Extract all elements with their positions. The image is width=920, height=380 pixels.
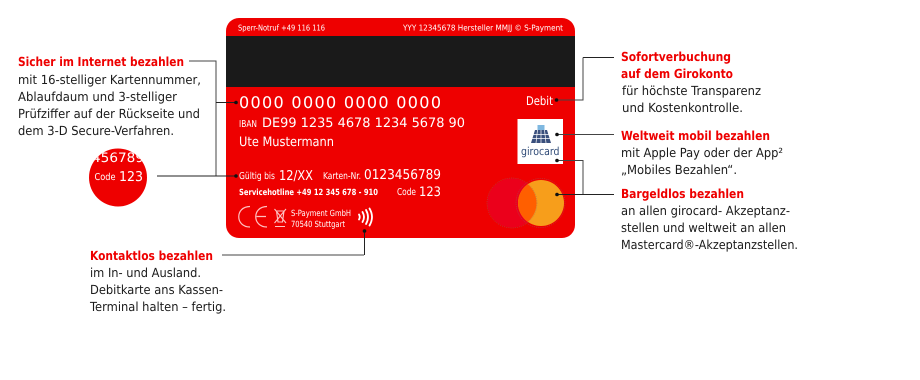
- heading: auf dem Girokonto: [621, 66, 733, 81]
- card number label: Karten-Nr.: [323, 171, 361, 182]
- heading: [621, 49, 733, 81]
- IBAN label: IBAN: [239, 119, 257, 130]
- emergency number: Sperr-Notruf +49 116 116: [238, 24, 325, 32]
- icon: CE mark: [239, 206, 267, 227]
- panel: card back: [226, 18, 575, 238]
- leader line: instant booking: [555, 58, 614, 102]
- service hotline: Servicehotline +49 12 345 678 - 910: [239, 188, 378, 198]
- text block: internet payment: [18, 54, 201, 138]
- body: [622, 83, 761, 115]
- text block: instant booking: [621, 49, 761, 115]
- valid until value: 12/XX: [279, 168, 313, 184]
- body: Mastercard®-Akzeptanzstellen.: [621, 237, 798, 252]
- heading: Bargeldlos bezahlen: [621, 186, 744, 201]
- magnetic stripe: [226, 36, 575, 87]
- heading: Weltweit mobil bezahlen: [621, 128, 770, 143]
- magnifier: security code: [89, 148, 147, 206]
- security code: 123: [419, 185, 441, 200]
- body: Ablaufdaum und 3-stelliger: [18, 89, 178, 104]
- manufacturer line: YYY 12345678 Hersteller MMJJ © S-Payment: [402, 24, 563, 32]
- body: im In- und Ausland.: [90, 265, 201, 280]
- text block: contactless payment: [89, 248, 226, 314]
- security code label: Code: [397, 187, 416, 198]
- body: Debitkarte ans Kassen-: [90, 282, 223, 297]
- heading: Sofortverbuchung: [621, 49, 731, 64]
- IBAN number: DE99 1235 4678 1234 5678 90: [262, 116, 465, 131]
- body: stellen und weltweit an allen: [621, 220, 786, 235]
- body: für höchste Transparenz: [622, 83, 761, 98]
- body: und Kostenkontrolle.: [622, 100, 743, 115]
- body: [621, 145, 783, 177]
- leader line: mobile payment: [555, 133, 614, 136]
- icon: girocard building: [531, 125, 551, 143]
- icon: WEEE bin: [274, 209, 286, 226]
- icon: contactless: [359, 208, 372, 226]
- body: an allen girocard- Akzeptanz-: [621, 203, 790, 218]
- body: dem 3-D Secure-Verfahren.: [18, 123, 174, 138]
- leader line: contactless: [222, 229, 366, 255]
- body: [18, 72, 201, 138]
- leader lines: cashless payment: [555, 159, 614, 196]
- magnified code label: Code: [94, 172, 116, 183]
- issuer name: S-Payment GmbH: [291, 209, 351, 219]
- magnified code: 123: [119, 169, 143, 185]
- valid until label: Gültig bis: [239, 171, 275, 182]
- text block: mobile payment: [621, 128, 783, 177]
- body: [89, 265, 226, 314]
- body: „Mobiles Bezahlen“.: [621, 162, 737, 177]
- infographic: [18, 18, 797, 314]
- body: Prüfziffer auf der Rückseite und: [18, 106, 200, 121]
- card number short: 0123456789: [364, 167, 441, 183]
- card body: [226, 18, 575, 238]
- card holder: Ute Mustermann: [239, 135, 334, 150]
- magnified number: 456789: [92, 151, 144, 166]
- body: mit 16-stelliger Kartennummer,: [18, 72, 201, 87]
- leader lines: internet payment: [157, 61, 238, 178]
- girocard wordmark: girocard: [521, 145, 560, 158]
- body: mit Apple Pay oder der App²: [621, 145, 783, 160]
- body: Terminal halten – fertig.: [89, 299, 226, 314]
- girocard logo: [518, 119, 563, 164]
- heading: Kontaktlos bezahlen: [90, 248, 213, 263]
- text block: cashless payment: [621, 186, 798, 252]
- issuer address: 70540 Stuttgart: [291, 220, 346, 230]
- heading: Sicher im Internet bezahlen: [18, 54, 184, 69]
- icon: Mastercard logo: [487, 178, 565, 228]
- body: [621, 203, 798, 252]
- debit label: Debit: [526, 94, 553, 108]
- card number: 0000 0000 0000 0000: [239, 93, 441, 112]
